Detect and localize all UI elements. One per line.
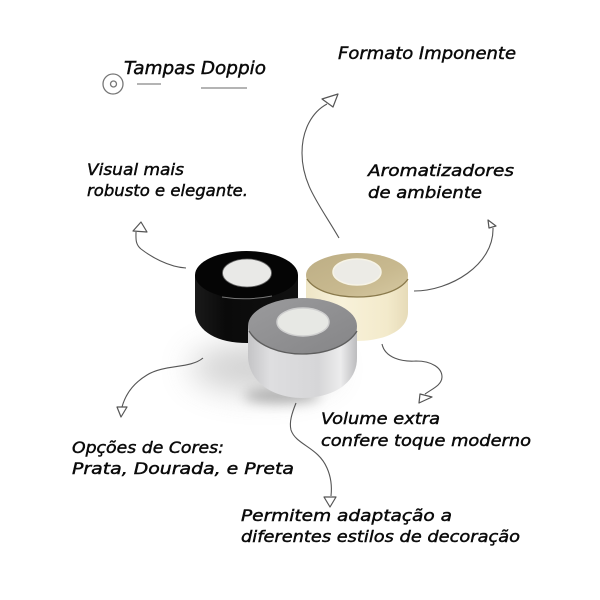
text: Volume extra xyxy=(321,409,531,450)
text: Permitem adaptação: diferentes estilos de decoração xyxy=(241,527,520,546)
text: Opções de Cores: Opções de Cores: xyxy=(72,438,224,457)
text: Aromatizadores de ambiente: Aromatizadores xyxy=(367,161,514,180)
product shadow xyxy=(190,344,334,403)
text: Aromatizadores de ambiente xyxy=(367,161,514,202)
cap: black xyxy=(195,251,298,343)
text: Volume extra: Volume extra xyxy=(321,409,440,428)
icon: cap top view xyxy=(103,74,123,94)
text: Visual mais robusto e elegante: robusto e elegante. xyxy=(87,181,248,200)
arrow: to Formato Imponente xyxy=(302,94,339,238)
text: Formato Imponente: Formato Imponente xyxy=(338,44,516,64)
arrow: to Opções de Cores xyxy=(117,358,203,417)
arrow: to Permitem adaptação xyxy=(290,403,336,507)
text: Aromatizadores de ambiente: de ambiente xyxy=(368,183,482,202)
text: Visual mais robusto e elegante xyxy=(87,160,248,200)
arrow: to Aromatizadores xyxy=(414,220,496,291)
cap: silver xyxy=(248,298,357,398)
text: Permitem adaptação: Permitem adaptação a xyxy=(241,506,452,525)
cap: gold xyxy=(306,253,408,341)
title: Tampas Doppio: Tampas Doppio xyxy=(124,58,266,79)
text: Opções de Cores: Prata, Dourada, e Preta xyxy=(72,459,294,478)
text: Permitem adaptação xyxy=(241,506,520,546)
text: Opções de Cores xyxy=(72,438,294,478)
arrow: to Visual mais xyxy=(133,222,186,268)
arrow: to Volume extra xyxy=(382,344,442,403)
text: Visual mais robusto e elegante: Visual mais xyxy=(87,160,184,179)
text: Volume extra: confere toque moderno xyxy=(321,431,531,450)
